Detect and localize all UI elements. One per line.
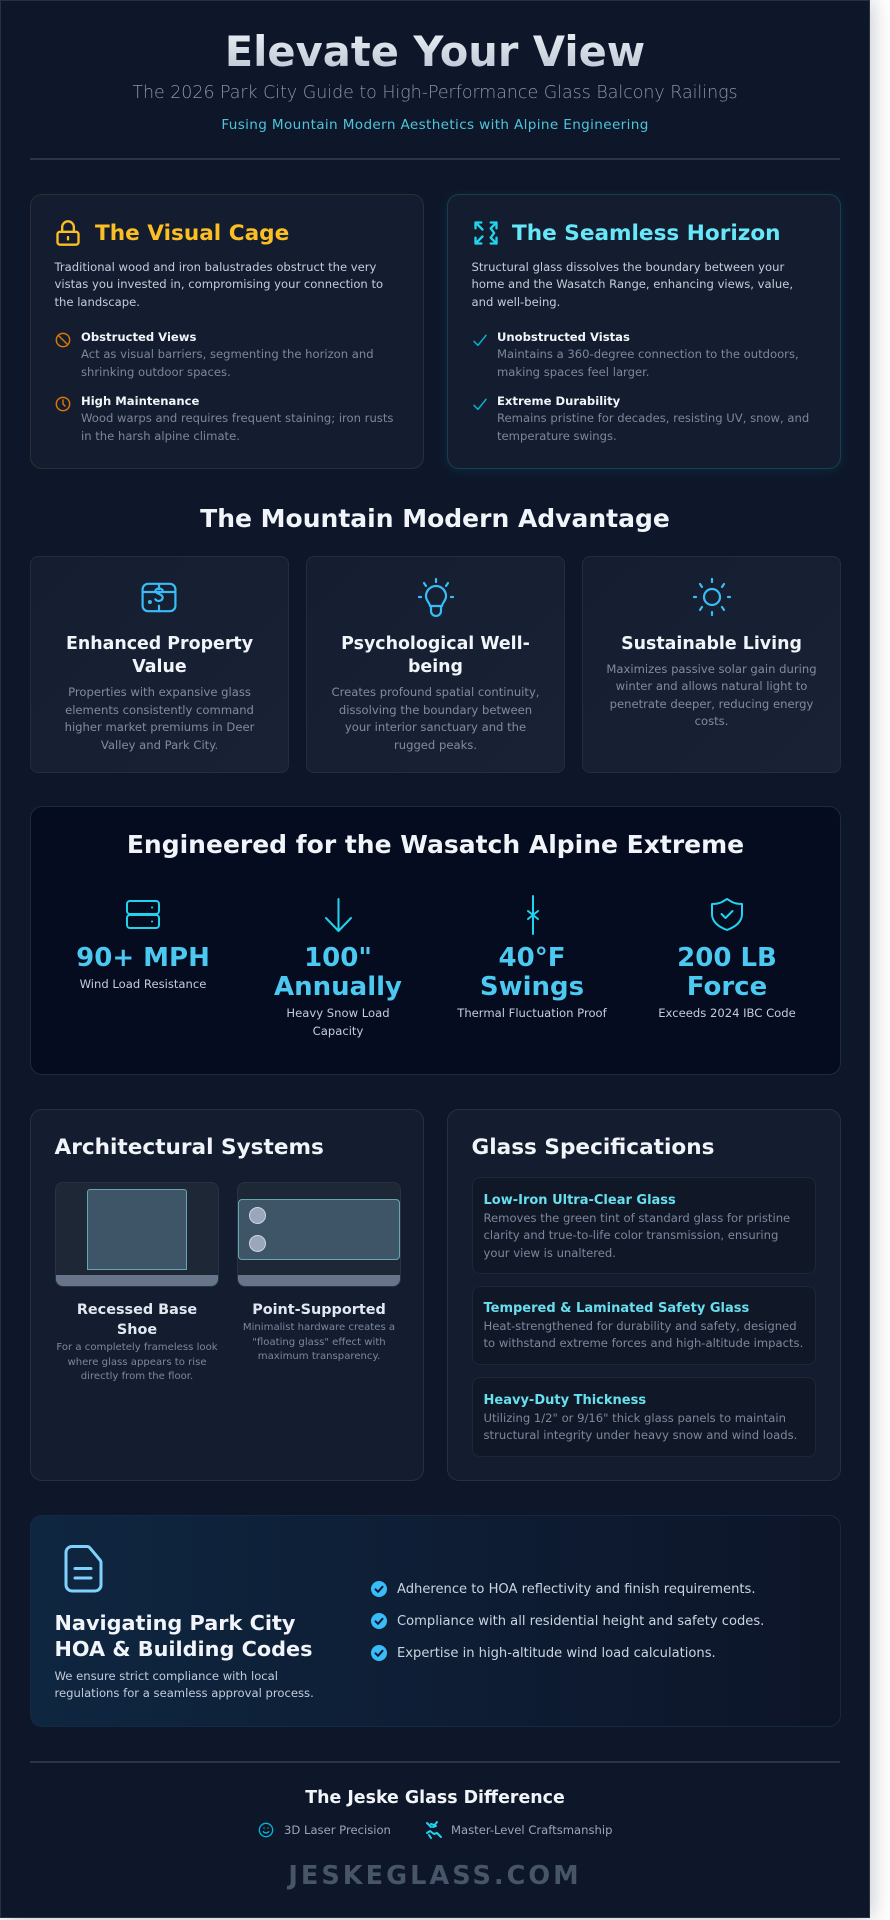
base	[237, 1275, 401, 1287]
title: Point-Supported	[252, 1302, 386, 1318]
intro text: the landscape.	[54, 295, 140, 309]
item text	[497, 330, 799, 379]
icon: lock	[56, 220, 80, 246]
subtitle: The 2026 Park City Guide to High-Performance Glass Balcony Railings	[132, 83, 738, 103]
item text: Maintains a 360-degree connection to the outdoors,	[497, 347, 799, 361]
item text	[497, 394, 809, 443]
intro text	[54, 260, 383, 309]
card: psychological well-being	[306, 556, 565, 773]
heading: Architectural Systems	[54, 1135, 324, 1160]
description: regulations for a seamless approval process.	[54, 1686, 314, 1700]
icon: check badge	[371, 1613, 387, 1629]
footer	[0, 1776, 870, 1901]
value: 100"	[304, 943, 372, 973]
intro text: vistas you invested in, compromising your connection to	[54, 277, 383, 291]
item text: Act as visual barriers, segmenting the horizon and	[81, 347, 374, 361]
panel: engineered stats	[30, 806, 841, 1075]
item text: in the harsh alpine climate.	[81, 429, 240, 443]
item text: Obstructed Views	[81, 330, 196, 344]
icon: check badge	[371, 1645, 387, 1661]
checklist	[371, 1576, 811, 1666]
item text: shrinking outdoor spaces.	[81, 365, 231, 379]
description: your interior sanctuary and the	[345, 720, 526, 734]
heading	[54, 1610, 313, 1662]
item: unobstructed vistas	[473, 330, 799, 379]
description: costs.	[695, 714, 728, 728]
description: dissolving the boundary between	[339, 702, 532, 716]
spec: low-iron	[472, 1177, 816, 1274]
item: high maintenance	[56, 394, 393, 443]
value	[480, 943, 584, 1002]
title: Elevate Your View	[225, 27, 645, 76]
header	[132, 27, 738, 133]
heading: Glass Specifications	[472, 1135, 714, 1160]
description	[56, 1342, 218, 1382]
heading: Enhanced Property	[66, 634, 253, 654]
section heading: advantage: The Mountain Modern Advantage	[200, 504, 670, 533]
value	[274, 943, 402, 1002]
item text: temperature swings.	[497, 429, 617, 443]
intro text: Structural glass dissolves the boundary between your	[472, 260, 784, 274]
label: Capacity	[313, 1024, 363, 1038]
icon: shield	[711, 898, 743, 931]
item text	[81, 330, 374, 379]
intro text: Traditional wood and iron balustrades obstruct the very	[54, 260, 376, 274]
title: Shoe	[117, 1322, 157, 1338]
description: Removes the green tint of standard glass for pristine	[484, 1211, 790, 1225]
value: Swings	[480, 972, 584, 1002]
text: Master-Level Craftsmanship	[451, 1823, 612, 1837]
item	[371, 1608, 811, 1634]
divider	[30, 1761, 840, 1763]
description: penetrate deeper, reducing energy	[610, 696, 813, 710]
description	[331, 685, 540, 752]
description	[606, 662, 817, 728]
item text: Extreme Durability	[497, 394, 620, 408]
title: Recessed Base	[77, 1302, 197, 1318]
description: "floating glass" effect with	[252, 1337, 386, 1348]
card: enhanced property value	[30, 556, 289, 773]
text: 3D Laser Precision	[284, 1823, 391, 1837]
icon: document	[65, 1545, 103, 1593]
title	[0, 25, 870, 79]
panel: glass specifications	[447, 1109, 841, 1481]
glass panel	[238, 1199, 400, 1260]
item text: Wood warps and requires frequent staining; iron rusts	[81, 411, 393, 425]
feature: craftsmanship	[426, 1820, 616, 1840]
description	[237, 1321, 401, 1365]
item	[371, 1640, 811, 1666]
spec: tempered	[472, 1286, 816, 1365]
value: 200 LB	[677, 943, 777, 973]
value: 40°F	[499, 943, 565, 973]
spec: thickness	[472, 1377, 816, 1457]
icon: dollar box	[142, 582, 176, 612]
description: structural integrity under heavy snow and wind loads.	[484, 1428, 797, 1442]
intro text	[472, 260, 793, 309]
title: Tempered & Laminated Safety Glass	[484, 1301, 749, 1316]
text: Compliance with all residential height and safety codes.	[397, 1614, 764, 1629]
label: Thermal Fluctuation Proof	[457, 1006, 607, 1020]
label: Exceeds 2024 IBC Code	[658, 1006, 796, 1020]
value: Force	[687, 972, 767, 1002]
panel: the visual cage	[30, 194, 424, 469]
title: Heavy-Duty Thickness	[484, 1393, 646, 1408]
description: directly from the floor.	[81, 1371, 193, 1382]
glass panel	[87, 1189, 187, 1270]
stat: snow load	[274, 898, 402, 1038]
description	[54, 1668, 314, 1703]
description: where glass appears to rise	[67, 1357, 207, 1368]
icon: snowflake line	[527, 895, 539, 935]
icon: check	[473, 334, 487, 346]
item	[371, 1576, 811, 1602]
icon: prohibited	[56, 332, 70, 348]
description: winter and allows natural light to	[616, 679, 807, 693]
icon: expand arrows	[474, 221, 498, 245]
icon: clock	[56, 396, 70, 412]
stat: thermal swings	[457, 895, 607, 1020]
divider	[30, 158, 840, 160]
panel: architectural systems	[30, 1109, 424, 1481]
description: your view is unaltered.	[484, 1246, 616, 1260]
heading: Value	[132, 657, 187, 677]
description: For a completely frameless look	[56, 1342, 218, 1353]
description: Creates profound spatial continuity,	[331, 685, 540, 699]
description: We ensure strict compliance with local	[54, 1669, 278, 1683]
item: obstructed views	[56, 330, 374, 379]
description: maximum transparency.	[258, 1351, 380, 1362]
description	[484, 1210, 790, 1262]
intro text: home and the Wasatch Range, enhancing views, value,	[472, 277, 793, 291]
description	[484, 1318, 803, 1353]
heading: Sustainable Living	[621, 634, 802, 654]
value	[677, 943, 777, 1002]
description: rugged peaks.	[394, 738, 477, 752]
heading: being	[408, 657, 463, 677]
website url: JESKEGLASS.COM	[288, 1861, 582, 1891]
description: Minimalist hardware creates a	[243, 1322, 395, 1333]
label: Wind Load Resistance	[80, 977, 206, 991]
feature: laser precision	[258, 1820, 398, 1840]
icon: tools	[426, 1821, 442, 1839]
card: sustainable living	[582, 556, 841, 773]
base shoe	[55, 1275, 219, 1287]
value: 90+ MPH	[76, 943, 210, 973]
text: Expertise in high-altitude wind load calculations.	[397, 1646, 716, 1661]
panel: the seamless horizon	[447, 194, 841, 469]
label: Heavy Snow Load	[286, 1006, 390, 1020]
title: Low-Iron Ultra-Clear Glass	[484, 1193, 676, 1208]
heading: Navigating Park City	[54, 1611, 295, 1635]
text: Adherence to HOA reflectivity and finish requirements.	[397, 1582, 756, 1597]
footer heading: The Jeske Glass Difference	[305, 1788, 565, 1808]
icon: smile	[258, 1822, 274, 1838]
item: extreme durability	[473, 394, 809, 443]
icon: sun	[692, 578, 732, 616]
stat: wind load	[76, 900, 210, 991]
description: elements consistently command	[65, 702, 254, 716]
tagline: Fusing Mountain Modern Aesthetics with Alpine Engineering	[221, 117, 649, 133]
icon: server	[126, 900, 160, 929]
description: Maximizes passive solar gain during	[606, 662, 817, 676]
standoff	[249, 1235, 266, 1252]
stat: force	[658, 898, 796, 1020]
description: Heat-strengthened for durability and safety, designed	[484, 1319, 797, 1333]
diagram	[237, 1182, 401, 1287]
item text: making spaces feel larger.	[497, 365, 649, 379]
icon: light bulb	[418, 578, 454, 618]
heading: HOA & Building Codes	[54, 1637, 313, 1661]
heading: Engineered for the Wasatch Alpine Extreme	[127, 830, 744, 859]
diagram	[55, 1182, 219, 1287]
intro text: and well-being.	[472, 295, 560, 309]
value: Annually	[274, 972, 402, 1002]
heading: The Visual Cage	[95, 221, 289, 246]
panel: HOA compliance	[30, 1515, 841, 1727]
description: Properties with expansive glass	[68, 685, 251, 699]
label	[286, 1006, 390, 1038]
icon: down arrow	[325, 898, 352, 932]
system: point-supported	[237, 1182, 401, 1382]
heading	[341, 634, 530, 677]
icon: check badge	[371, 1581, 387, 1597]
item text: Remains pristine for decades, resisting UV, snow, and	[497, 411, 809, 425]
item text: High Maintenance	[81, 394, 199, 408]
title	[77, 1302, 197, 1338]
description: clarity and true-to-life color transmission, ensuring	[484, 1228, 778, 1242]
description: Valley and Park City.	[101, 738, 218, 752]
icon: check	[473, 398, 487, 410]
heading	[66, 634, 253, 677]
description: to withstand extreme forces and high-altitude impacts.	[484, 1336, 803, 1350]
item text	[81, 394, 393, 443]
heading: The Seamless Horizon	[512, 221, 781, 246]
heading: Psychological Well-	[341, 634, 530, 654]
description	[484, 1410, 797, 1445]
description	[65, 685, 254, 752]
system: recessed base shoe	[55, 1182, 219, 1382]
description: Utilizing 1/2" or 9/16" thick glass panels to maintain	[484, 1411, 786, 1425]
item text: Unobstructed Vistas	[497, 330, 630, 344]
description: higher market premiums in Deer	[65, 720, 254, 734]
standoff	[249, 1207, 266, 1224]
